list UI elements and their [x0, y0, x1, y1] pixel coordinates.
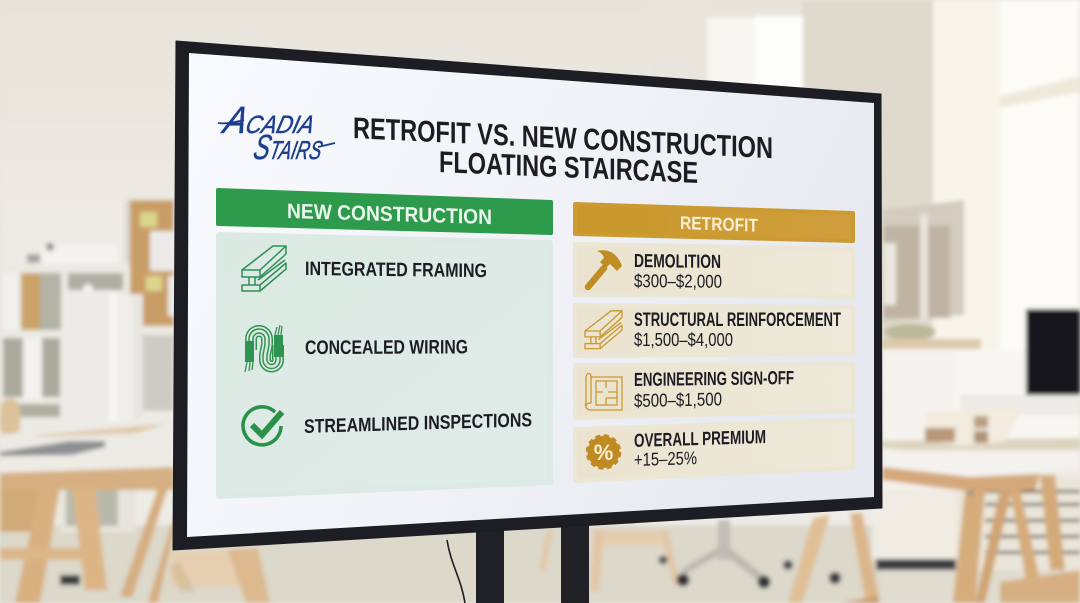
- stand poles: [476, 520, 589, 603]
- floor: [0, 525, 1080, 603]
- wooden legs lower right: [788, 512, 880, 603]
- panel: retrofit: [575, 204, 853, 481]
- monitor: [960, 309, 1080, 415]
- title: [353, 112, 773, 190]
- row: structural reinforcement: [575, 305, 853, 356]
- right desk with model: [872, 408, 1080, 603]
- streamlined inspections label: STREAMLINED INSPECTIONS: [304, 409, 532, 438]
- title: FLOATING STAIRCASE: [439, 146, 698, 190]
- demolition text: $300–$2,000: [634, 270, 722, 292]
- retrofit header: [575, 204, 853, 241]
- icon: hammer: [588, 250, 622, 287]
- screen panel: [187, 53, 874, 537]
- icon: percent badge: [588, 436, 620, 468]
- left desk: [0, 398, 175, 603]
- icon: green i-beam: [242, 246, 286, 291]
- logo: Acadia Stairs: STAIRS: [250, 128, 327, 167]
- demolition text: [634, 251, 722, 292]
- icon: green wiring: [245, 325, 283, 372]
- monitor frame: [173, 41, 882, 550]
- new construction header: [218, 190, 551, 233]
- white binders: [62, 284, 143, 435]
- logo: Acadia Stairs: [218, 100, 335, 167]
- row: demolition: [575, 244, 853, 297]
- concealed wiring label: CONCEALED WIRING: [305, 336, 468, 359]
- row: engineering sign-off: [575, 364, 853, 418]
- chair and stool behind stand: [539, 520, 841, 591]
- structural reinforcement text: [634, 310, 841, 350]
- wood stool under screen: [170, 548, 270, 603]
- overall premium text: +15–25%: [634, 447, 697, 470]
- integrated framing label: INTEGRATED FRAMING: [305, 258, 487, 282]
- panel: new construction: [218, 190, 551, 496]
- engineering sign-off text: [634, 368, 794, 411]
- logo: Acadia Stairs: ACADIA: [218, 100, 320, 142]
- power cable: [447, 540, 465, 603]
- title: RETROFIT VS. NEW CONSTRUCTION: [353, 112, 773, 165]
- shelves: [0, 243, 174, 434]
- structural reinforcement text: STRUCTURAL REINFORCEMENT: [634, 310, 841, 331]
- overall premium text: [634, 427, 766, 470]
- right wall and windows: [650, 0, 1080, 489]
- engineering sign-off text: ENGINEERING SIGN-OFF: [634, 368, 794, 391]
- new construction body: [219, 235, 550, 496]
- retrofit heading text: RETROFIT: [680, 212, 759, 236]
- engineering sign-off text: $500–$1,500: [634, 388, 722, 411]
- structural reinforcement text: $1,500–$4,000: [634, 329, 733, 350]
- icon: blueprint: [586, 373, 622, 410]
- overall premium text: OVERALL PREMIUM: [634, 427, 766, 452]
- picture and shelf right: [882, 200, 981, 349]
- new construction heading text: NEW CONSTRUCTION: [287, 200, 492, 229]
- corkboard: [125, 200, 174, 326]
- demolition text: DEMOLITION: [634, 251, 721, 273]
- icon: gold i-beam: [585, 311, 622, 349]
- icon: percent badge: %: [594, 440, 613, 465]
- row: overall premium: [575, 420, 853, 481]
- icon: green check: [243, 407, 282, 445]
